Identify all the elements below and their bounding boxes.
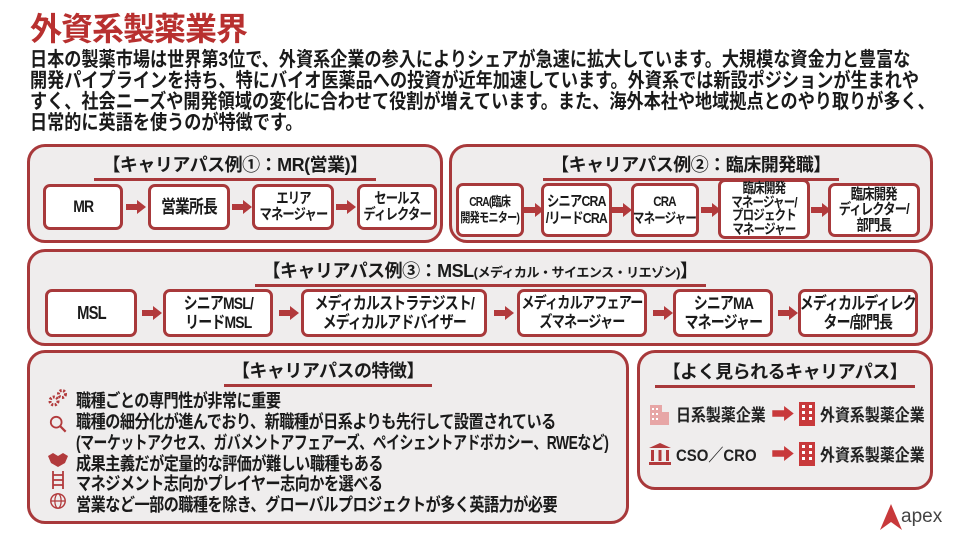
box: 臨床開発マネージャー: プロジェクト bbox=[732, 207, 796, 223]
icon: magnifier bbox=[50, 416, 66, 432]
heading: 【キャリアパスの特徴】 bbox=[232, 361, 424, 381]
icon: ladder bbox=[52, 471, 64, 489]
box: シニアMAマネージャー: シニアMA bbox=[693, 294, 753, 313]
box: 臨床開発マネージャー: マネージャー/ bbox=[731, 194, 797, 210]
arrow bbox=[701, 203, 718, 217]
box: CRA bbox=[456, 183, 524, 237]
intro paragraph: 日本の製薬市場は世界第3位で、外資系企業の参入によりシェアが急速に拡大しています。大規模な資金力と豊富な bbox=[30, 49, 910, 71]
box: シニアCRA bbox=[541, 183, 612, 237]
intro paragraph: 日常的に英語を使うのが特徴です。 bbox=[30, 112, 303, 134]
arrow bbox=[494, 306, 514, 320]
heading: 【キャリアパス例①：MR(営業)】 bbox=[102, 155, 368, 175]
bullet 1: 職種ごとの専門性が非常に重要 bbox=[76, 391, 280, 411]
box: シニアMAマネージャー: マネージャー bbox=[684, 313, 762, 332]
heading: 【キャリアパス例②：臨床開発職】 bbox=[551, 155, 831, 175]
intro paragraph: すく、社会ニーズや開発領域の変化に合わせて役割が増えています。また、海外本社や地域拠点とのやり取りが多く、 bbox=[30, 91, 935, 113]
logo: apex: apex bbox=[901, 506, 942, 527]
box: メディカルディレクター bbox=[798, 289, 918, 337]
box: 臨床開発マネージャー: マネージャー bbox=[732, 220, 796, 236]
panel: career path 3 MSL bbox=[27, 249, 933, 346]
bullet 4: マネジメント志向かプレイヤー志向かを選べる bbox=[76, 474, 382, 494]
arrow bbox=[811, 203, 828, 217]
heading: 【キャリアパス例③：MSL(メディカル・サイエンス・リエゾン)】 bbox=[262, 261, 698, 281]
arrow bbox=[279, 306, 299, 320]
box: 営業所長 bbox=[148, 184, 230, 230]
box: CRAマネージャー: CRA bbox=[654, 193, 676, 209]
box: 臨床開発ディレクター bbox=[828, 183, 920, 237]
icon: handshake bbox=[48, 453, 68, 467]
box: MR bbox=[43, 184, 123, 230]
box: メディカルディレクター: メディカルディレク bbox=[800, 294, 916, 313]
box: CRAマネージャー bbox=[631, 183, 699, 237]
box: シニアMSL: リードMSL bbox=[185, 313, 251, 332]
row 2: CSO／CRO bbox=[676, 446, 757, 465]
box: 営業所長: 営業所長 bbox=[161, 197, 217, 217]
box: メディカルアフェアーズマネージャー: ズマネージャー bbox=[539, 314, 625, 331]
box: シニアCRA: /リードCRA bbox=[546, 210, 607, 227]
arrow bbox=[612, 203, 631, 217]
box: シニアMSL bbox=[163, 289, 273, 337]
row 1: 外資系製薬企業 bbox=[820, 406, 925, 425]
row 2: 外資系製薬企業 bbox=[820, 446, 925, 465]
box: メディカルディレクター: ター/部門長 bbox=[824, 313, 892, 332]
box: 臨床開発マネージャー bbox=[718, 179, 810, 239]
box: CRAマネージャー: マネージャー bbox=[633, 210, 697, 226]
box: メディカルアフェアーズマネージャー: メディカルアフェアー bbox=[521, 295, 643, 312]
box: セールスディレクター: ディレクター bbox=[363, 206, 431, 223]
bullet 2 cont: (マーケットアクセス、ガバメントアフェアーズ、ペイシェントアドボカシー、RWEなど) bbox=[76, 433, 608, 453]
bullet 2: 職種の細分化が進んでおり、新職種が日系よりも先行して設置されている bbox=[76, 412, 556, 432]
box: MSL bbox=[45, 289, 137, 337]
box: セールスディレクター: セールス bbox=[374, 190, 420, 207]
arrow bbox=[336, 200, 356, 214]
box: MSL: MSL bbox=[77, 303, 105, 323]
row 2 bbox=[649, 442, 925, 466]
box: MR: MR bbox=[73, 197, 93, 216]
heading: 【よく見られるキャリアパス】 bbox=[663, 362, 907, 382]
title: 外資系製薬業界 bbox=[30, 11, 247, 47]
box: シニアMAマネージャー bbox=[673, 289, 773, 337]
arrow bbox=[232, 200, 252, 214]
box: セールスディレクター bbox=[357, 184, 437, 230]
box: エリアマネージャー bbox=[252, 184, 334, 230]
bullet 5: 営業など一部の職種を除き、グローバルプロジェクトが多く英語力が必要 bbox=[76, 495, 557, 515]
panel: common career paths bbox=[637, 350, 933, 490]
box: エリアマネージャー: マネージャー bbox=[259, 206, 327, 223]
bullet 3: 成果主義だが定量的な評価が難しい職種もある bbox=[76, 454, 383, 474]
arrow bbox=[778, 306, 798, 320]
row 1 bbox=[650, 402, 925, 426]
box: メディカルアフェアーズマネージャー bbox=[517, 289, 647, 337]
box: シニアCRA: シニアCRA bbox=[547, 193, 606, 210]
arrow bbox=[653, 306, 673, 320]
arrow bbox=[524, 203, 541, 217]
row 1: 日系製薬企業 bbox=[676, 406, 766, 425]
box: 臨床開発ディレクター: ディレクター/ bbox=[839, 201, 909, 218]
box: CRA: CRA(臨床 bbox=[470, 194, 510, 209]
intro paragraph bbox=[30, 48, 935, 134]
icon: gears bbox=[48, 389, 67, 406]
panel: career path features bbox=[27, 350, 629, 524]
box: シニアMSL: シニアMSL/ bbox=[183, 294, 253, 313]
panel: career path 1 MR bbox=[27, 144, 443, 243]
arrow bbox=[142, 306, 162, 320]
icon: globe bbox=[50, 493, 66, 509]
intro paragraph: 開発パイプラインを持ち、特にバイオ医薬品への投資が近年加速しています。外資系では新設ポジションが生まれや bbox=[30, 70, 919, 92]
box: 臨床開発マネージャー: 臨床開発 bbox=[743, 180, 785, 196]
logo: apex bbox=[880, 504, 942, 530]
icon: institution bbox=[649, 443, 671, 465]
box: メディカルストラテジスト bbox=[301, 289, 487, 337]
box: 臨床開発ディレクター: 部門長 bbox=[857, 217, 891, 234]
icon: building light bbox=[650, 405, 669, 425]
arrow bbox=[126, 200, 146, 214]
box: メディカルストラテジスト: メディカルアドバイザー bbox=[322, 313, 466, 332]
panel: career path 2 clinical bbox=[449, 144, 933, 243]
box: CRA: 開発モニター) bbox=[461, 210, 519, 225]
box: 臨床開発ディレクター: 臨床開発 bbox=[851, 186, 897, 203]
box: エリアマネージャー: エリア bbox=[276, 190, 310, 207]
box: メディカルストラテジスト: メディカルストラテジスト/ bbox=[314, 294, 474, 313]
